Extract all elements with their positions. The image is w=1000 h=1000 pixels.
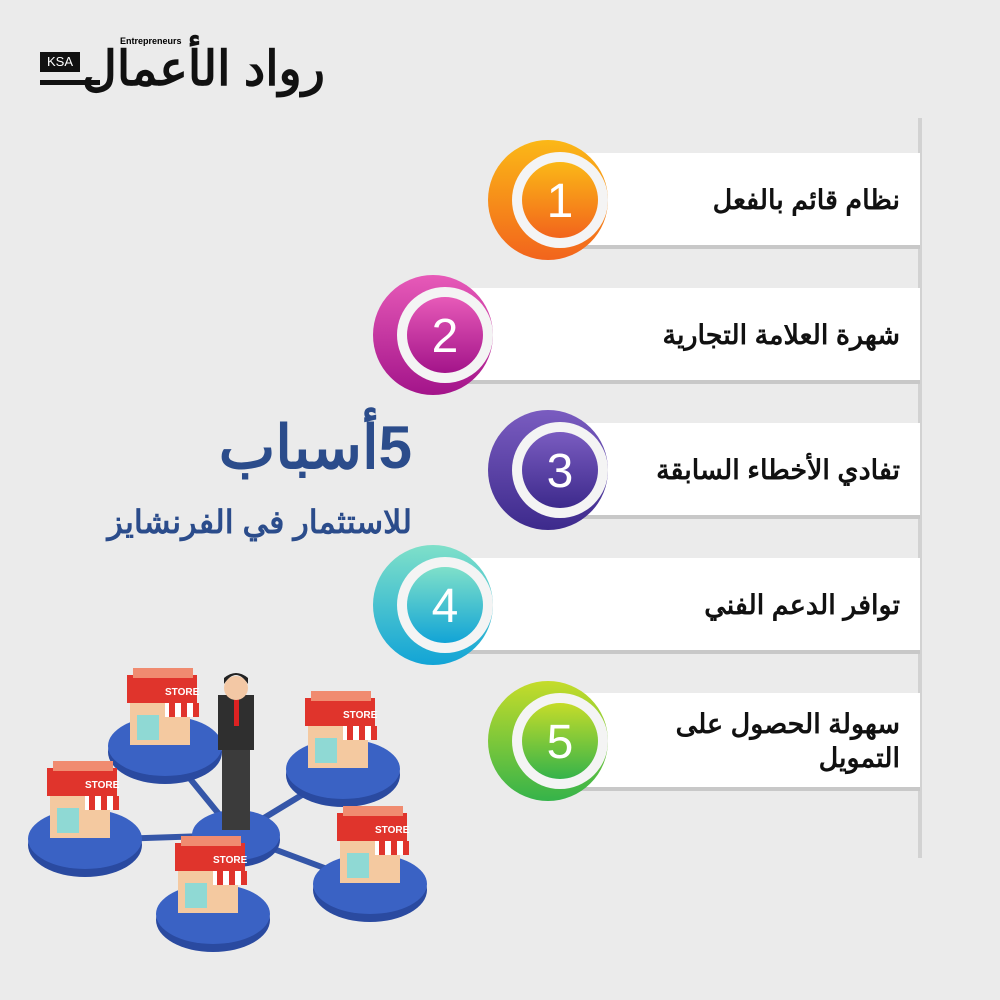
item 2 (373, 275, 920, 395)
text: سهولة الحصول على (676, 709, 900, 739)
item 4: 4 (432, 580, 458, 633)
text: شهرة العلامة التجارية (663, 320, 900, 350)
item texts: نظام قائم بالفعل (713, 185, 900, 215)
subtitle: للاستثمار في الفرنشايز (107, 504, 412, 540)
logo: رواد الأعمال (82, 43, 325, 96)
item 1 (488, 140, 920, 260)
businessman (218, 673, 254, 830)
text: توافر الدعم الفني (704, 590, 900, 620)
logo: Entrepreneurs (120, 36, 182, 46)
item 3 (488, 410, 920, 530)
text: التمويل (819, 743, 900, 773)
vertical line (918, 118, 922, 858)
item 3: 3 (547, 445, 573, 498)
item 1: 1 (547, 175, 573, 228)
item 5 (488, 681, 920, 801)
logo: KSA (47, 54, 73, 69)
text: تفادي الأخطاء السابقة (656, 455, 900, 485)
item 5: 5 (547, 716, 573, 769)
title: 5أسباب (219, 414, 412, 481)
item 4 (373, 545, 920, 665)
illustration: franchise network (28, 668, 427, 952)
item 2: 2 (432, 310, 458, 363)
